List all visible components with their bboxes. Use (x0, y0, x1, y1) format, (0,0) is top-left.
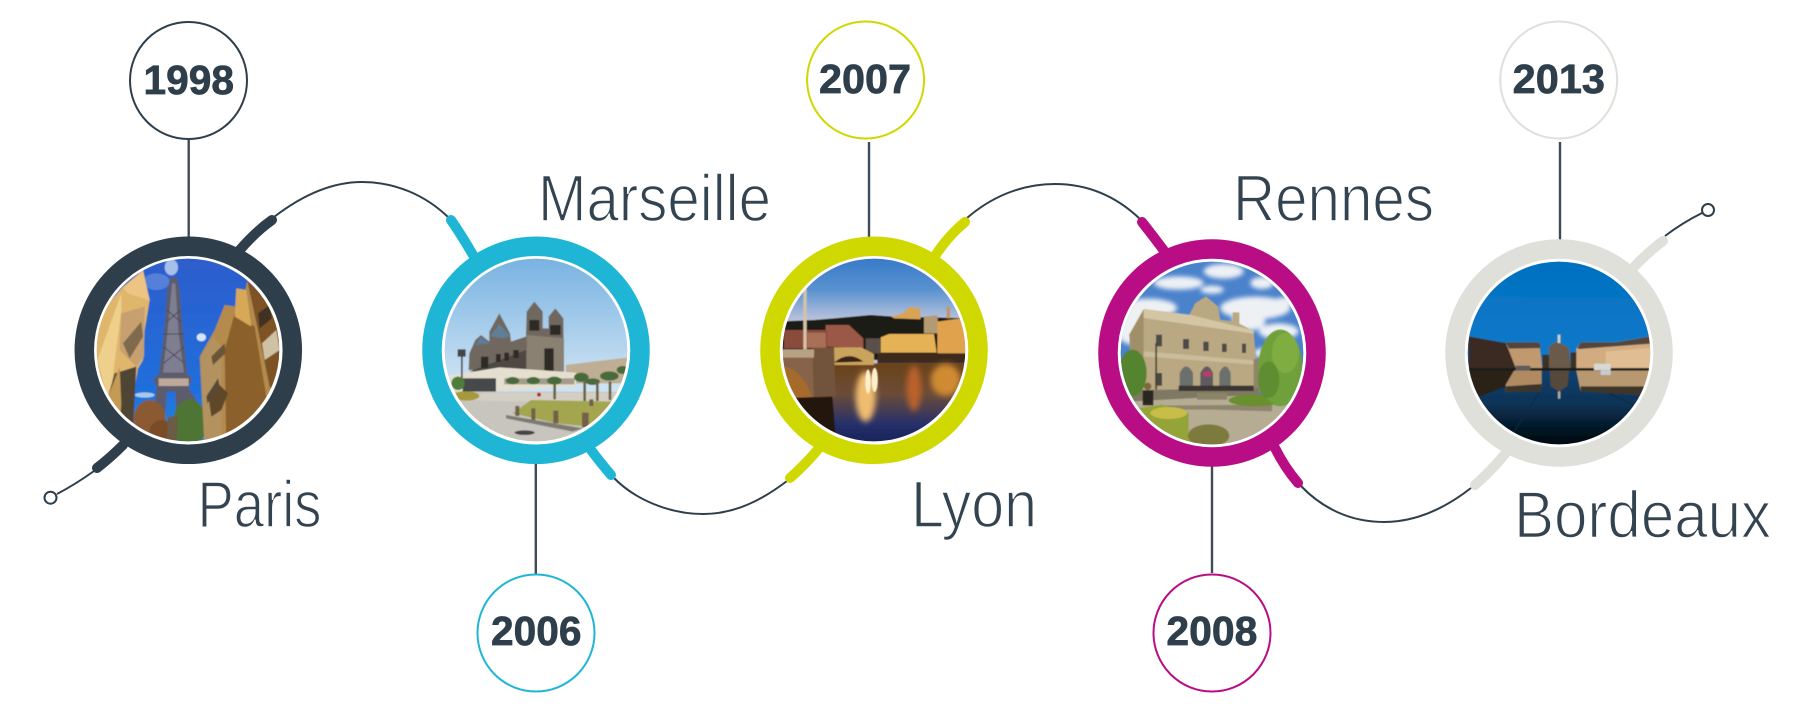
connector: end tail (1633, 204, 1714, 268)
stem: 2007 (868, 142, 870, 238)
ring: Lyon (770, 246, 978, 454)
ring: Rennes (1108, 249, 1316, 457)
photo: Rennes (1120, 262, 1304, 444)
label: Bordeaux: Bordeaux (1514, 478, 1771, 552)
year badge: 2006: 2006 (491, 608, 582, 654)
photo: Paris (96, 258, 280, 442)
photo: Bordeaux (1468, 262, 1650, 444)
stem: 2008 (1211, 465, 1213, 573)
ring: Marseille (432, 246, 640, 454)
year badge: 2013: 2013 (1513, 56, 1605, 102)
stem: 2013 (1559, 142, 1561, 241)
ring: Paris (84, 246, 292, 454)
connector: Rennes to Bordeaux (1275, 448, 1505, 522)
ring: Bordeaux (1455, 249, 1663, 457)
connector: Marseille to Lyon (591, 447, 820, 514)
connector: start tail (44, 445, 123, 504)
stem: 2006 (535, 462, 537, 574)
year badge: 1998: 1998 (144, 57, 234, 103)
year badge: 2007 (807, 22, 924, 138)
year badge: 2008 (1154, 574, 1270, 692)
label: Marseille: Marseille (538, 161, 771, 235)
label: Paris: Paris (198, 467, 322, 541)
label: Rennes: Rennes (1233, 161, 1434, 235)
year badge: 2008: 2008 (1166, 608, 1257, 654)
year badge: 2007: 2007 (819, 56, 911, 102)
connector: Paris to Marseille (238, 182, 473, 255)
label: Lyon: Lyon (911, 467, 1037, 541)
year badge: 1998 (130, 22, 247, 139)
connector: Lyon to Rennes (935, 184, 1165, 256)
photo: Lyon (782, 258, 966, 442)
stem: 1998 (187, 139, 190, 238)
year badge: 2013 (1500, 22, 1617, 138)
photo: Marseille (444, 258, 628, 442)
year badge: 2006 (478, 574, 594, 692)
